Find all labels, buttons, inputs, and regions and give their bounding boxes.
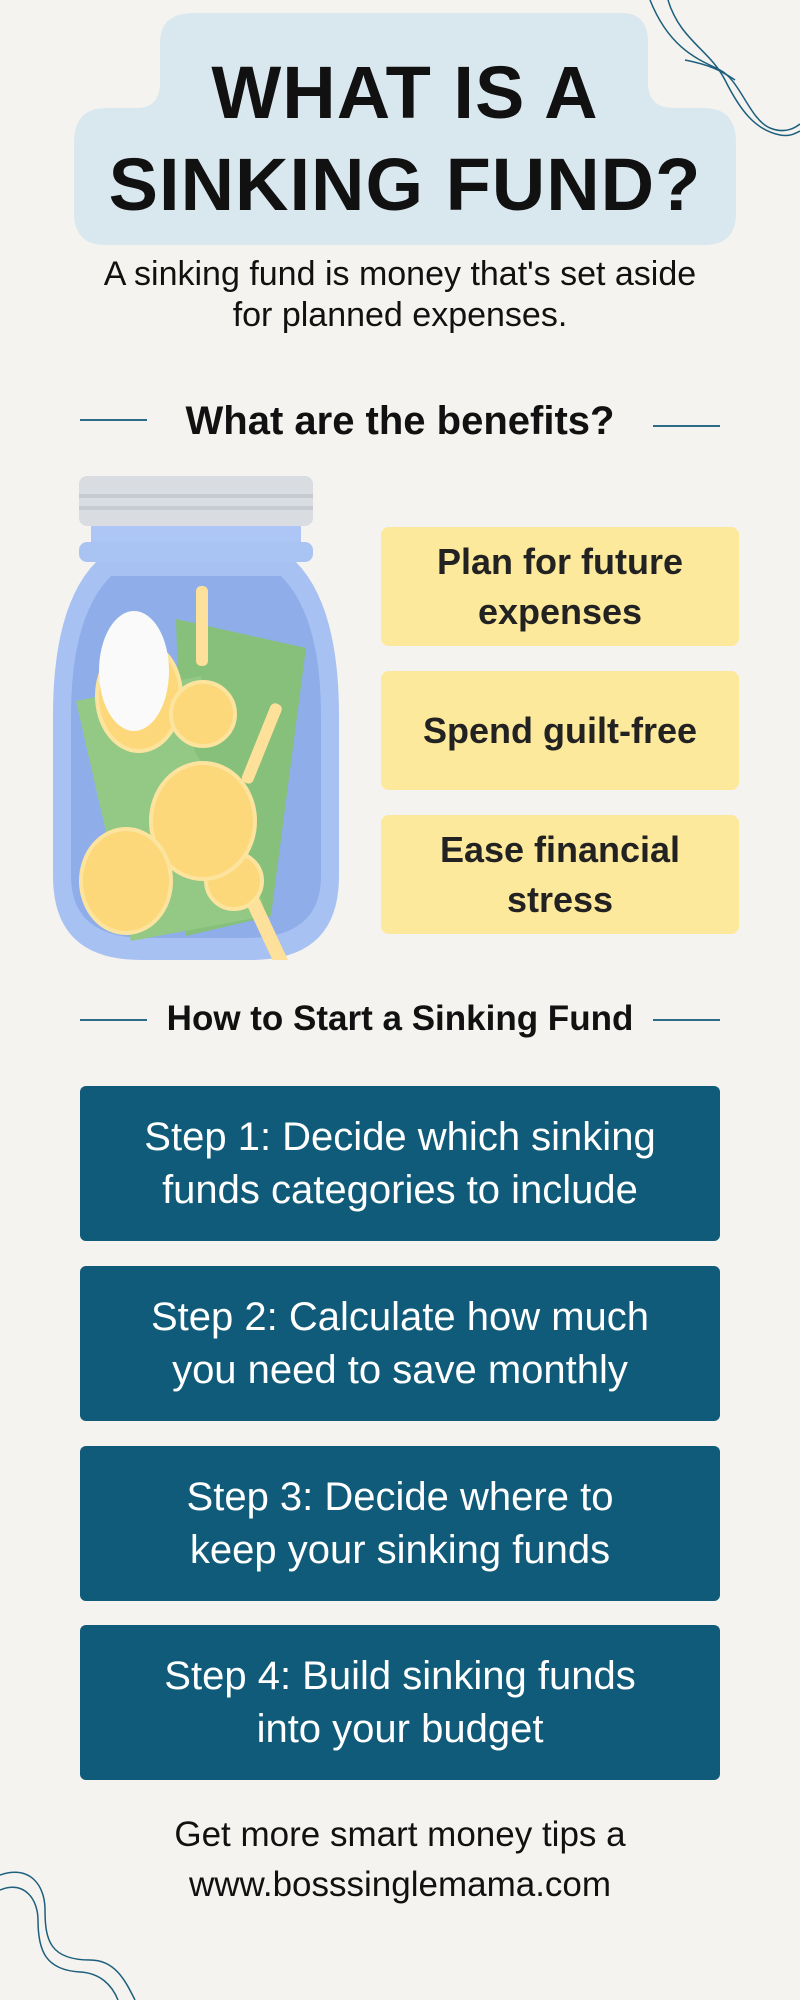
decoration: bottom-left swirl [0,1872,136,2000]
step 1 [80,1086,720,1241]
benefit box 1: Plan for future [437,540,683,582]
step 1: funds categories to include [162,1168,638,1212]
heading: benefits: What are the benefits? [186,399,614,443]
step 3: keep your sinking funds [190,1528,610,1572]
benefit box 2: Spend guilt-free [423,710,697,750]
heading: how to start: How to Start a Sinking Fund [167,999,633,1038]
benefit box 1 [381,527,739,646]
subtitle: for planned expenses. [233,296,567,334]
step 2: Step 2: Calculate how much [151,1294,649,1338]
benefit box 3 [381,815,739,934]
subtitle: A sinking fund is money that's set aside [104,255,696,293]
step 2 [80,1266,720,1421]
step 3: Step 3: Decide where to [187,1474,613,1518]
benefit box 3: Ease financial [440,828,680,870]
title: WHAT IS A [211,51,599,134]
title [74,13,736,245]
step 1: Step 1: Decide which sinking [144,1114,656,1158]
benefit box 3: stress [507,878,613,920]
title: SINKING FUND? [109,143,701,226]
subtitle [104,255,696,334]
benefit box 2 [381,671,739,790]
benefit box 1: expenses [478,590,642,632]
step 3 [80,1446,720,1601]
footer: Get more smart money tips a [174,1815,626,1854]
step 4 [80,1625,720,1780]
illustration: money jar [53,476,339,960]
step 2: you need to save monthly [172,1348,628,1392]
decoration: top-right swirl [649,0,800,136]
step 4: into your budget [257,1706,543,1750]
footer: www.bosssinglemama.com [189,1865,611,1904]
footer [174,1815,626,1904]
step 4: Step 4: Build sinking funds [164,1654,636,1698]
